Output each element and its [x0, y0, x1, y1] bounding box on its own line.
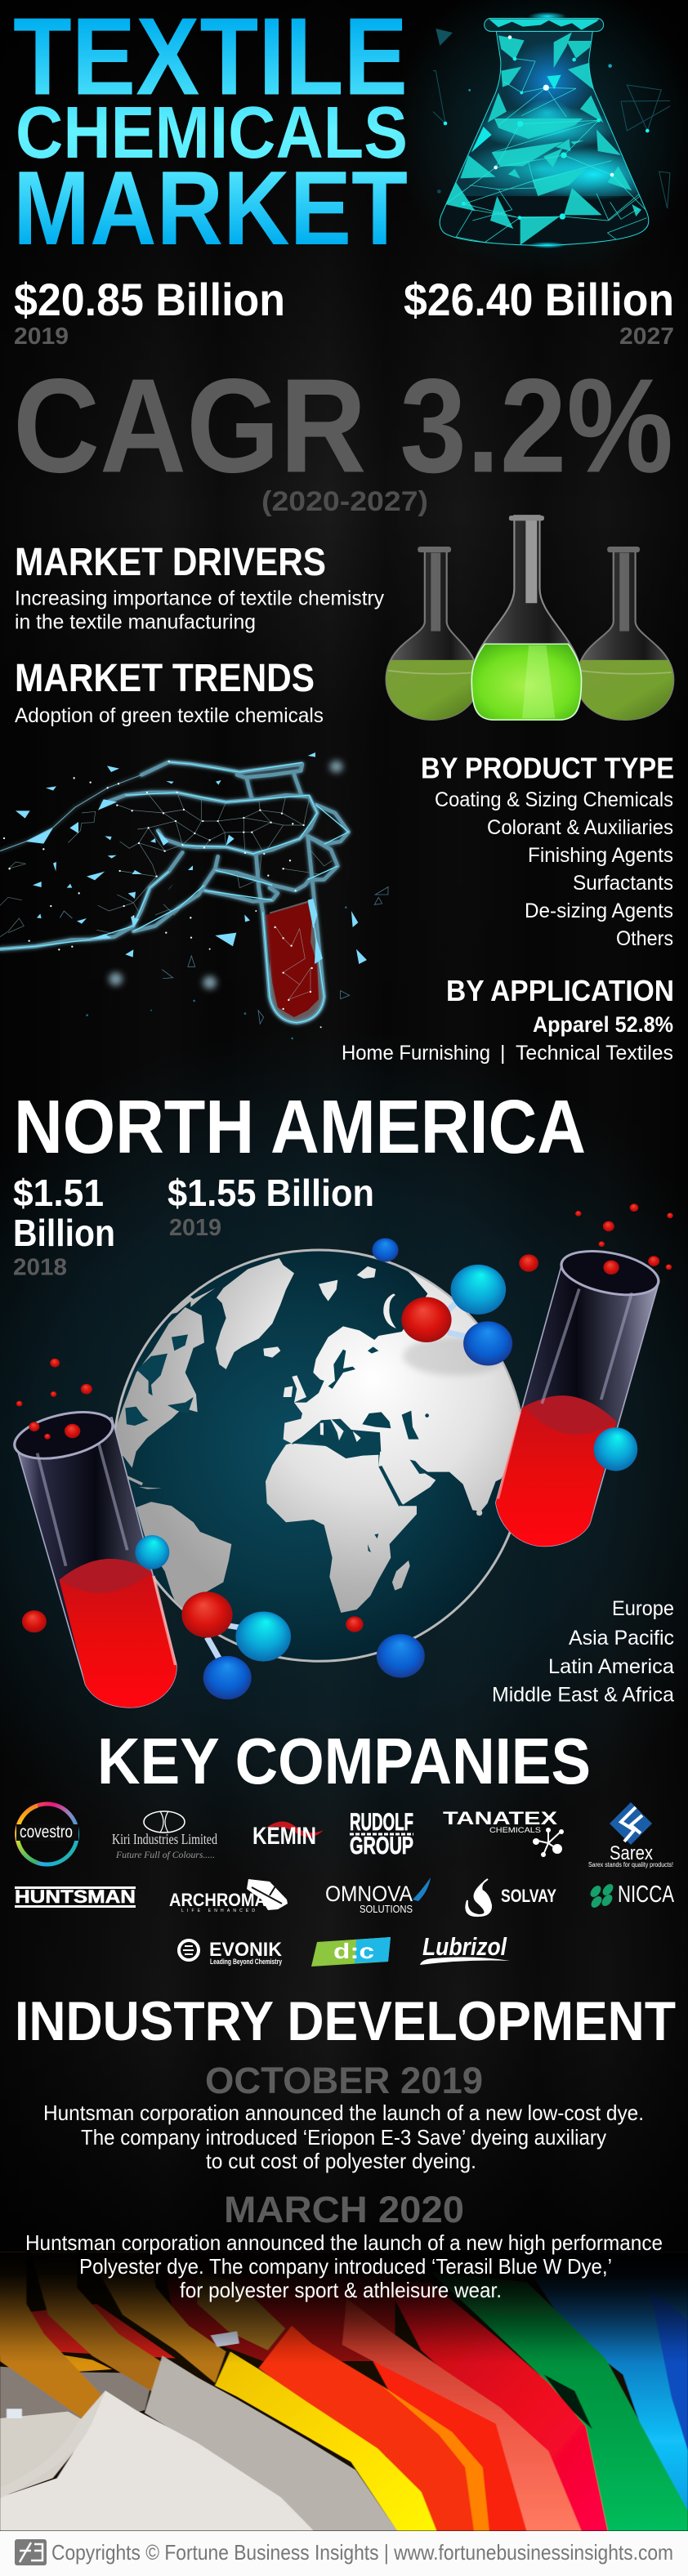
- logo: solvay: SOLVAY: [501, 1886, 556, 1906]
- logo: tanatex: CHEMICALS: [489, 1826, 541, 1834]
- logo: kiri industries: [112, 1811, 217, 1860]
- logo: sarex: Sarex stands for quality products!: [588, 1861, 673, 1868]
- logo: omnova: SOLUTIONS: [360, 1903, 413, 1915]
- by product type list: Colorant & Auxiliaries: [487, 816, 673, 839]
- stat: 2019 market size: $20.85 Billion: [14, 274, 285, 325]
- development: march 2020: Polyester dye. The company introduced ‘Terasil Blue W Dye,’: [79, 2254, 612, 2279]
- logo: rudolf group: GROUP: [350, 1833, 413, 1859]
- logo: evonik: Leading Beyond Chemistry: [210, 1958, 282, 1966]
- logo: huntsman: HUNTSMAN: [15, 1886, 136, 1907]
- by product type list: [421, 752, 674, 950]
- development: october 2019: to cut cost of polyester dyeing.: [206, 2149, 476, 2173]
- stat: north america 2018: $1.51: [13, 1172, 104, 1214]
- stat: north america 2019: [168, 1172, 374, 1241]
- market trends: MARKET TRENDS: [15, 657, 315, 700]
- stat: 2019 market size: [14, 274, 285, 350]
- by application list: BY APPLICATION: [446, 974, 674, 1007]
- logo: archroma: ARCHROMA: [169, 1890, 266, 1910]
- logo: solvay: [466, 1879, 556, 1916]
- title: MARKET: [13, 150, 408, 267]
- logo: evonik: [179, 1939, 283, 1966]
- logo: lubrizol: Lubrizol: [422, 1932, 507, 1961]
- development: october 2019: Huntsman corporation announced the launch of a new low-cost dye.: [43, 2101, 644, 2125]
- logo: nicca: [588, 1882, 674, 1909]
- north america heading: NORTH AMERICA: [14, 1084, 586, 1169]
- market trends: [15, 657, 324, 727]
- stat: north america 2018: [13, 1172, 115, 1281]
- market drivers: Increasing importance of textile chemistry: [15, 587, 384, 609]
- development: october 2019: OCTOBER 2019: [205, 2060, 483, 2101]
- by application list: |: [500, 1042, 505, 1065]
- photo: row of coloured t-shirts: [0, 2252, 688, 2531]
- title: [13, 0, 408, 267]
- logo: sarex: [588, 1802, 673, 1868]
- other regions list: Latin America: [548, 1655, 674, 1678]
- icon: left test tube and molecules: [9, 1359, 425, 1708]
- logo: dic: [311, 1937, 391, 1967]
- development: march 2020: Huntsman corporation announced the launch of a new high performance: [25, 2230, 663, 2255]
- icon: glowing polygon flask: [417, 0, 673, 255]
- by application list: Technical Textiles: [516, 1042, 673, 1065]
- logo: tanatex: [443, 1808, 564, 1857]
- market drivers: [15, 541, 384, 634]
- logo: covestro: covestro: [20, 1823, 73, 1842]
- globe with world map: [112, 1250, 531, 1661]
- other regions list: Europe: [612, 1597, 674, 1620]
- by product type list: Others: [616, 927, 673, 950]
- development: october 2019: [43, 2060, 644, 2173]
- logo: archroma: [169, 1879, 288, 1913]
- stat: 2027 market size: [404, 274, 674, 350]
- icon: polygon hand holding test tube: [0, 752, 388, 1039]
- title: CHEMICALS: [16, 92, 408, 174]
- logo: omnova: OMNOVA: [325, 1882, 413, 1906]
- by product type list: Surfactants: [573, 872, 673, 895]
- development: march 2020: for polyester sport & athleisure wear.: [180, 2278, 502, 2302]
- stat: 2019 market size: 2019: [14, 324, 69, 350]
- logo: kiri industries: Future Full of Colours.....: [115, 1849, 215, 1860]
- by application list: Home Furnishing: [342, 1042, 490, 1065]
- market drivers: in the textile manufacturing: [15, 611, 256, 634]
- key companies heading: KEY COMPANIES: [97, 1725, 591, 1797]
- development: october 2019: The company introduced ‘Eriopon E-3 Save’ dyeing auxiliary: [81, 2125, 606, 2150]
- logo: covestro: [16, 1804, 78, 1864]
- stat: north america 2019: $1.55 Billion: [168, 1172, 374, 1214]
- icon: right test tube and molecules: [372, 1203, 673, 1547]
- stat: north america 2019: 2019: [169, 1215, 221, 1241]
- by product type list: De-sizing Agents: [525, 900, 673, 922]
- stat: north america 2018: 2018: [13, 1255, 67, 1281]
- logo: archroma: LIFE ENHANCED: [181, 1909, 255, 1913]
- stat: 2027 market size: $26.40 Billion: [404, 274, 674, 325]
- logo: tanatex: TANATEX: [443, 1808, 557, 1828]
- other regions list: Middle East & Africa: [492, 1683, 674, 1706]
- logo: kiri industries: Kiri Industries Limited: [112, 1831, 217, 1847]
- stat: CAGR: (2020-2027): [261, 486, 428, 517]
- logo: dic: d:c: [333, 1939, 374, 1963]
- by application list: [342, 974, 674, 1065]
- other regions list: Asia Pacific: [569, 1627, 674, 1650]
- icon: three green flasks: [382, 516, 678, 722]
- other regions list: [492, 1597, 674, 1706]
- development: march 2020: MARCH 2020: [224, 2189, 464, 2230]
- by application list: Apparel 52.8%: [533, 1012, 673, 1037]
- logo: sarex: Sarex: [610, 1842, 653, 1864]
- market drivers: MARKET DRIVERS: [15, 541, 326, 584]
- development: march 2020: [25, 2189, 663, 2302]
- logo: kemin: KEMIN: [252, 1823, 316, 1850]
- by product type list: Coating & Sizing Chemicals: [435, 788, 673, 811]
- market trends: Adoption of green textile chemicals: [15, 704, 324, 727]
- by product type list: Finishing Agents: [528, 844, 673, 867]
- logo: rudolf group: RUDOLF: [350, 1809, 413, 1836]
- footer: [0, 2531, 688, 2576]
- logo: rudolf group: [350, 1809, 413, 1859]
- stat: 2027 market size: 2027: [619, 324, 674, 350]
- stat: north america 2018: Billion: [13, 1212, 115, 1254]
- logo: evonik: EVONIK: [209, 1939, 283, 1961]
- logo: omnova: [325, 1877, 431, 1915]
